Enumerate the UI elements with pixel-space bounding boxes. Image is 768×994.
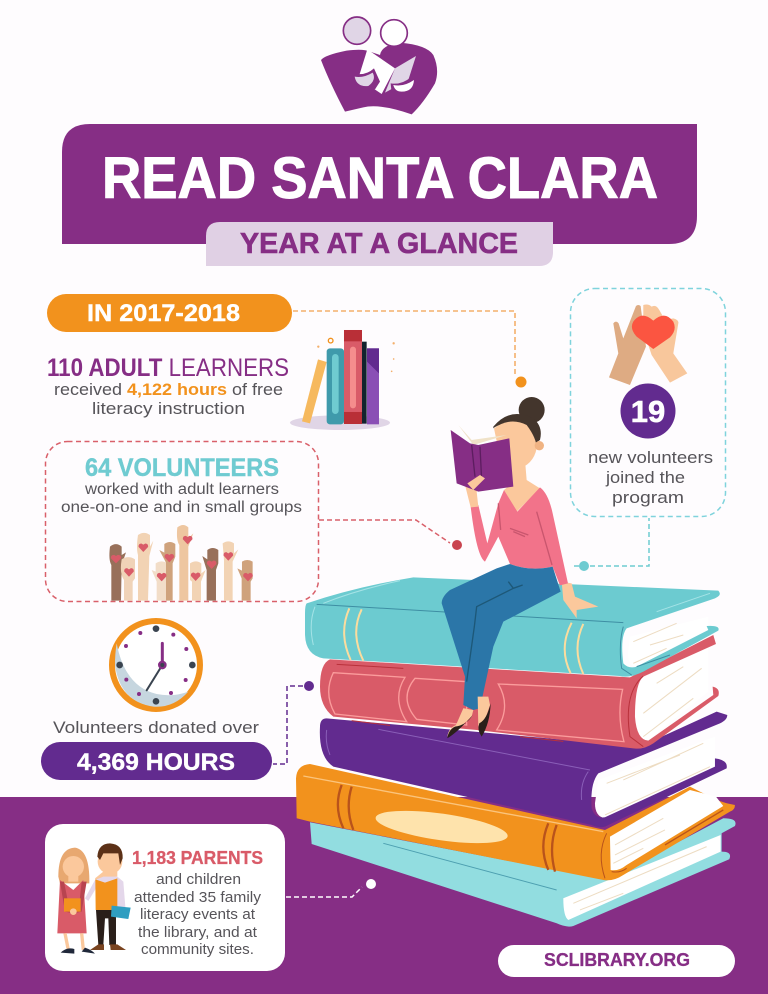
connector: white dashed line with dot	[286, 879, 376, 897]
connector: orange dashed line with dot	[293, 311, 526, 388]
icon: hands holding heart	[609, 304, 687, 385]
orange book	[296, 764, 735, 880]
hand holding book	[465, 475, 485, 507]
volunteers text	[61, 481, 302, 516]
hours text: Volunteers donated over	[53, 718, 259, 737]
illustration: woman reading	[442, 397, 598, 738]
volunteers heading: 64 VOLUNTEERS	[85, 454, 279, 482]
adult learners stat	[47, 354, 289, 418]
new volunteers text: program	[612, 488, 684, 507]
parents text	[134, 872, 262, 958]
open book	[451, 425, 513, 492]
purple book	[320, 712, 727, 827]
year pill: IN 2017-2018	[87, 300, 240, 327]
parents text: attended 35 family	[134, 890, 262, 906]
icon: clock	[112, 621, 200, 709]
shoes	[447, 697, 491, 738]
panel: volunteers	[46, 442, 318, 602]
pink sweater	[471, 487, 568, 585]
new volunteers text: joined the	[605, 468, 685, 487]
hours pill: 4,369 HOURS	[77, 749, 235, 776]
volunteers text: one-on-one and in small groups	[61, 499, 302, 516]
hours pill	[41, 742, 272, 780]
new volunteers text	[588, 448, 713, 507]
neck and chest	[504, 460, 540, 512]
illustration: parents	[57, 843, 131, 954]
adult learners stat: received 4,122 hours of free	[54, 380, 283, 399]
new volunteers text: new volunteers	[588, 448, 713, 467]
title banner	[62, 124, 697, 266]
website pill: SCLIBRARY.ORG	[544, 950, 690, 970]
connector: teal dashed line with dot	[574, 518, 649, 571]
website pill	[498, 945, 735, 977]
volunteers text: worked with adult learners	[84, 481, 279, 498]
red book	[320, 635, 719, 749]
icon: stack of books	[290, 330, 395, 430]
connector: red dashed line with dot	[319, 520, 462, 550]
purple footer background	[0, 797, 768, 994]
jeans	[442, 564, 561, 710]
bottom light teal book	[310, 818, 736, 927]
adult learners stat: literacy instruction	[92, 399, 245, 418]
top teal book	[305, 577, 720, 677]
year pill	[47, 294, 292, 332]
panel: new volunteers	[570, 288, 726, 516]
number badge	[620, 384, 676, 438]
parents text: and children	[156, 872, 241, 888]
fingers	[467, 475, 485, 490]
logo icon	[321, 17, 437, 114]
parents text: community sites.	[141, 942, 254, 958]
connector: purple dashed line with dot	[273, 681, 314, 764]
icon: raised hands with hearts	[109, 525, 253, 601]
illustration: stack of books	[296, 577, 736, 927]
arm hand on book	[562, 582, 598, 618]
hair bun	[493, 397, 545, 445]
parents heading: 1,183 PARENTS	[132, 848, 263, 868]
number badge: 19	[631, 394, 665, 429]
parents text: the library, and at	[138, 925, 257, 941]
subtitle band	[206, 222, 553, 266]
face	[494, 422, 537, 469]
parents text: literacy events at	[140, 907, 255, 923]
adult learners stat: 110 ADULT LEARNERS	[47, 354, 289, 382]
panel: parents card	[45, 824, 285, 971]
subtitle text: YEAR AT A GLANCE	[240, 228, 518, 260]
title text: READ SANTA CLARA	[102, 146, 658, 211]
